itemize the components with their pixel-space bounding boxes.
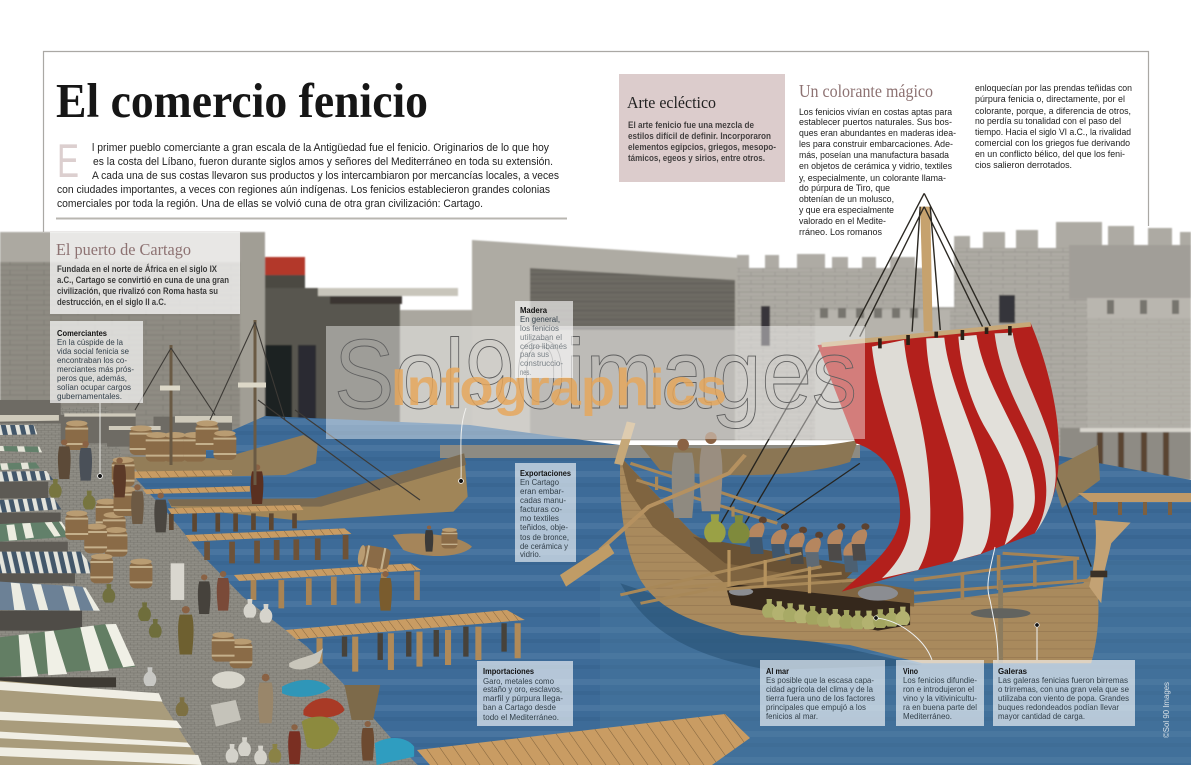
callout: Exportaciones: eran embar- xyxy=(520,486,564,496)
text column 2: Un colorante mágico: colorante, porque, a diferencia de otros, xyxy=(975,106,1131,116)
text column 1: Un colorante mágico: valorado en el Medite- xyxy=(799,216,886,226)
intro text: comerciales por toda la región. Una de ellas se volvió cuna de otra gran civilización: Cartago. xyxy=(57,198,483,210)
text: Arte ecléctico xyxy=(628,120,776,163)
callout: Al mar: cidad agrícola del clima y de la xyxy=(766,684,873,694)
callout: Galeras: Las galeras fenicias fueron birremas xyxy=(998,675,1128,685)
callout: Comerciantes xyxy=(50,321,143,403)
callout: Exportaciones: vidrio. xyxy=(520,549,541,559)
callout: Madera: Madera xyxy=(520,305,547,315)
text: Arte ecléctico: támicos, egeos y sirios, entre otros. xyxy=(628,153,765,163)
callout: Exportaciones: En Cartago xyxy=(520,477,559,487)
callout: Exportaciones: tos de bronce, xyxy=(520,532,569,542)
traders xyxy=(58,439,392,764)
large tan awning xyxy=(0,681,202,765)
callout: Vino: Vino xyxy=(903,666,918,676)
callout: Exportaciones: cadas manu- xyxy=(520,495,566,505)
text column 1: Un colorante mágico: ques eran abundantes en maderas idea- xyxy=(799,128,956,138)
callout: Comerciantes: encontraban los co- xyxy=(57,355,127,365)
callout: Importaciones: ban a Cartago desde xyxy=(483,702,556,712)
illustration: harbour background walls xyxy=(0,222,1191,480)
leader line: Vino xyxy=(874,616,932,660)
hull shadow xyxy=(620,583,922,670)
callout: Al mar xyxy=(760,660,885,726)
callout: Importaciones: estaño y oro, esclavos, xyxy=(483,684,562,694)
callout: Exportaciones: facturas co- xyxy=(520,504,562,514)
callout: Al mar: Es posible que la escasa capa- xyxy=(766,675,874,685)
text column 1: Un colorante mágico xyxy=(799,107,956,237)
intro text: es la costa del Líbano, fueron durante siglos amos y señores del Mediterráneo en toda su extensión. xyxy=(93,156,553,168)
text: El puerto de Cartago xyxy=(57,264,229,307)
callout: Madera: los fenicios xyxy=(520,323,559,333)
steering oar xyxy=(560,455,745,587)
stern figures and jars xyxy=(672,432,750,543)
callout: Comerciantes: merciantes más prós- xyxy=(57,364,134,374)
callout: Galeras xyxy=(993,660,1135,726)
callout: Galeras: buques redondeados podían llevar xyxy=(998,702,1119,712)
callout: Exportaciones: teñidos, obje- xyxy=(520,522,568,532)
text column 2: Un colorante mágico: cios salieron derrotados. xyxy=(975,160,1072,170)
pier 1 xyxy=(129,470,303,532)
callout: Importaciones: todo el Mediterráneo. xyxy=(483,712,559,722)
text column 1: Un colorante mágico: más, poseían una manufactura basada xyxy=(799,150,949,160)
callout: Galeras: o trirremas, con una gran vela que se xyxy=(998,684,1129,694)
callout: Madera: nes. xyxy=(520,367,531,377)
callout: Madera: cedro libanés xyxy=(520,341,567,351)
bow rails and prow xyxy=(914,520,1131,603)
text column 1: Un colorante mágico: rráneo. Los romanos xyxy=(799,227,882,237)
text column 1: Un colorante mágico: en objetos de cerámica y vidrio, textiles xyxy=(799,161,952,171)
text column 2: Un colorante mágico: no perdía su tonalidad con el paso del xyxy=(975,116,1121,126)
callout: Vino: ra en buena parte del xyxy=(903,702,977,712)
front boat xyxy=(168,453,468,521)
text: Arte ecléctico: elementos egipcios, griegos, mesopo- xyxy=(628,142,776,152)
hull xyxy=(614,421,1098,663)
callout: Madera xyxy=(515,301,573,378)
callout: Importaciones xyxy=(477,661,573,726)
callout: Importaciones: marfil y púrpura llega- xyxy=(483,693,563,703)
text: Arte ecléctico: estilos difícil de definir. Incorporaron xyxy=(628,131,771,141)
illustration: market quay and piers xyxy=(0,400,525,765)
callout: Madera: En general, xyxy=(520,314,560,324)
text column 2: Un colorante mágico xyxy=(975,83,1132,170)
illustration: harbour water xyxy=(0,416,1191,765)
deck and rowers xyxy=(620,517,869,603)
copyright: ©Sol 90 Images xyxy=(1162,682,1171,738)
back boat xyxy=(125,435,318,478)
text column 1: Un colorante mágico: y que era especialmente xyxy=(799,205,894,215)
heading: Un colorante mágico: Un colorante mágico xyxy=(799,81,933,101)
callout: Al mar: principales que empujó a los xyxy=(766,702,866,712)
rigging to the hull xyxy=(721,330,1091,567)
callout: Importaciones: Garo, metales como xyxy=(483,676,554,686)
text column 2: Un colorante mágico: tiempo. Hacia el siglo VI a.C., la rivalidad xyxy=(975,127,1131,137)
intro text: l primer pueblo comerciante a gran escala de la Antigüedad fue el fenicio. Originarios de lo que hoy xyxy=(92,142,549,154)
panel: El puerto de Cartago xyxy=(50,232,240,314)
mast and ropes xyxy=(850,193,991,337)
callout: Comerciantes: gubernamentales. xyxy=(57,391,122,401)
intro text xyxy=(57,142,559,210)
striped sail xyxy=(818,323,1059,592)
leader line: Al mar xyxy=(988,547,998,660)
callout: Al mar: Al mar xyxy=(766,666,790,676)
barrel carried on the pier xyxy=(356,544,392,570)
text column 1: Un colorante mágico: do púrpura de Tiro, que xyxy=(799,183,890,193)
intro text: A cada una de sus costas llevaron sus productos y los intercambiaron por mercancías locales, a veces xyxy=(92,170,559,182)
text column 1: Un colorante mágico: establecer puertos naturales. Sus bos- xyxy=(799,117,952,127)
callout: Importaciones: Importaciones xyxy=(483,666,534,676)
text: El puerto de Cartago: Fundada en el norte de África en el siglo IX xyxy=(57,264,217,274)
callout: Vino: vino y la vitivinicultu- xyxy=(903,693,977,703)
intro text: con ciudades importantes, a veces con regiones aún indígenas. Los fenicios establecieron grandes colonias xyxy=(57,184,550,196)
text column 2: Un colorante mágico: púrpura fenicia o, directamente, por el xyxy=(975,94,1125,104)
callout: Comerciantes: Comerciantes xyxy=(57,328,107,338)
callout: Exportaciones: de cerámica y xyxy=(520,541,569,551)
heading: El puerto de Cartago: El puerto de Cartago xyxy=(56,240,191,259)
text column 1: Un colorante mágico: obtenían de un molusco, xyxy=(799,194,894,204)
text: El puerto de Cartago: destrucción, en el siglo II a.C. xyxy=(57,297,166,307)
illustration: galley ship xyxy=(560,193,1131,670)
callout: Madera: para sus xyxy=(520,349,549,359)
callout: Vino: Los fenicios difundie- xyxy=(903,675,977,685)
illustration: bottom pier xyxy=(417,714,750,765)
pier 4 xyxy=(286,610,525,672)
pier 2 xyxy=(186,528,352,563)
callout: Comerciantes: solían ocupar cargos xyxy=(57,382,131,392)
illustration: masts and rigging of moored boats xyxy=(135,320,420,500)
callout: Comerciantes: En la cúspide de la xyxy=(57,337,123,347)
callout: Madera: construccio- xyxy=(520,358,563,368)
callout: Vino xyxy=(896,660,984,726)
text: El puerto de Cartago: a.C., Cartago se convirtió en cuna de una gran xyxy=(57,275,229,285)
text column 2: Un colorante mágico: enloquecían por las prendas teñidas con xyxy=(975,83,1132,93)
amphorae and goods xyxy=(49,479,414,765)
text: Arte ecléctico: El arte fenicio fue una mezcla de xyxy=(628,120,754,130)
callout: Exportaciones: Exportaciones xyxy=(520,468,571,478)
callout: Galeras: Galeras xyxy=(998,666,1027,676)
leader line: Comerciantes xyxy=(98,403,102,478)
callout: Vino: Mediterráneo. xyxy=(903,711,952,721)
leader line: Madera xyxy=(459,408,466,483)
text column 2: Un colorante mágico: comercial con los griegos fue derivando xyxy=(975,138,1130,148)
text column 1: Un colorante mágico: Los fenicios vivían en costas aptas para xyxy=(799,107,952,117)
leader line: Galeras xyxy=(1035,623,1039,660)
callout: Vino: ron e introdujeron el xyxy=(903,684,974,694)
awnings xyxy=(0,413,232,687)
callout: Comerciantes: vida social fenicia se xyxy=(57,346,129,356)
watermark: Sol 90 images: Sol90images xyxy=(334,319,857,429)
text: El puerto de Cartago: civilización, que rivalizó con Roma hasta su xyxy=(57,286,218,296)
heading: Arte ecléctico: Arte ecléctico xyxy=(627,93,716,112)
drop cap: E xyxy=(57,134,79,187)
watermark panel xyxy=(326,319,865,439)
amphorae in the hold xyxy=(729,586,910,629)
frame border xyxy=(44,52,1148,232)
watermark: Infographics: Infographics xyxy=(391,359,727,417)
callout: Exportaciones xyxy=(515,463,576,562)
callout: Galeras: utilizaba con viento de popa. Grandes xyxy=(998,693,1129,703)
text column 1: Un colorante mágico: y, especialmente, un colorante llama- xyxy=(799,173,946,183)
text column 2: Un colorante mágico: en un conflicto bélico, del que los feni- xyxy=(975,149,1125,159)
illustration: right pier xyxy=(1078,493,1191,515)
anchor post xyxy=(971,580,1030,663)
pier 3 xyxy=(234,563,421,608)
title: El comercio fenicio xyxy=(56,73,428,128)
barrels xyxy=(65,420,252,668)
small rowing boat xyxy=(393,525,472,556)
callout: Exportaciones: mo textiles xyxy=(520,513,559,523)
text column 1: Un colorante mágico: les para construir embarcaciones. Ade- xyxy=(799,139,953,149)
callout: Comerciantes: peros que, además, xyxy=(57,373,127,383)
illustration: far boat on the right xyxy=(1050,445,1100,508)
callout: Al mar: fenicios al mar. xyxy=(766,711,818,721)
callout: Al mar: tierra fuera uno de los factores xyxy=(766,693,875,703)
callout: Galeras: mayor cantidad de carga. xyxy=(998,711,1085,721)
wall of stalls xyxy=(0,400,232,447)
panel: Arte ecléctico xyxy=(619,74,785,182)
callout: Madera: utilizaban el xyxy=(520,332,562,342)
